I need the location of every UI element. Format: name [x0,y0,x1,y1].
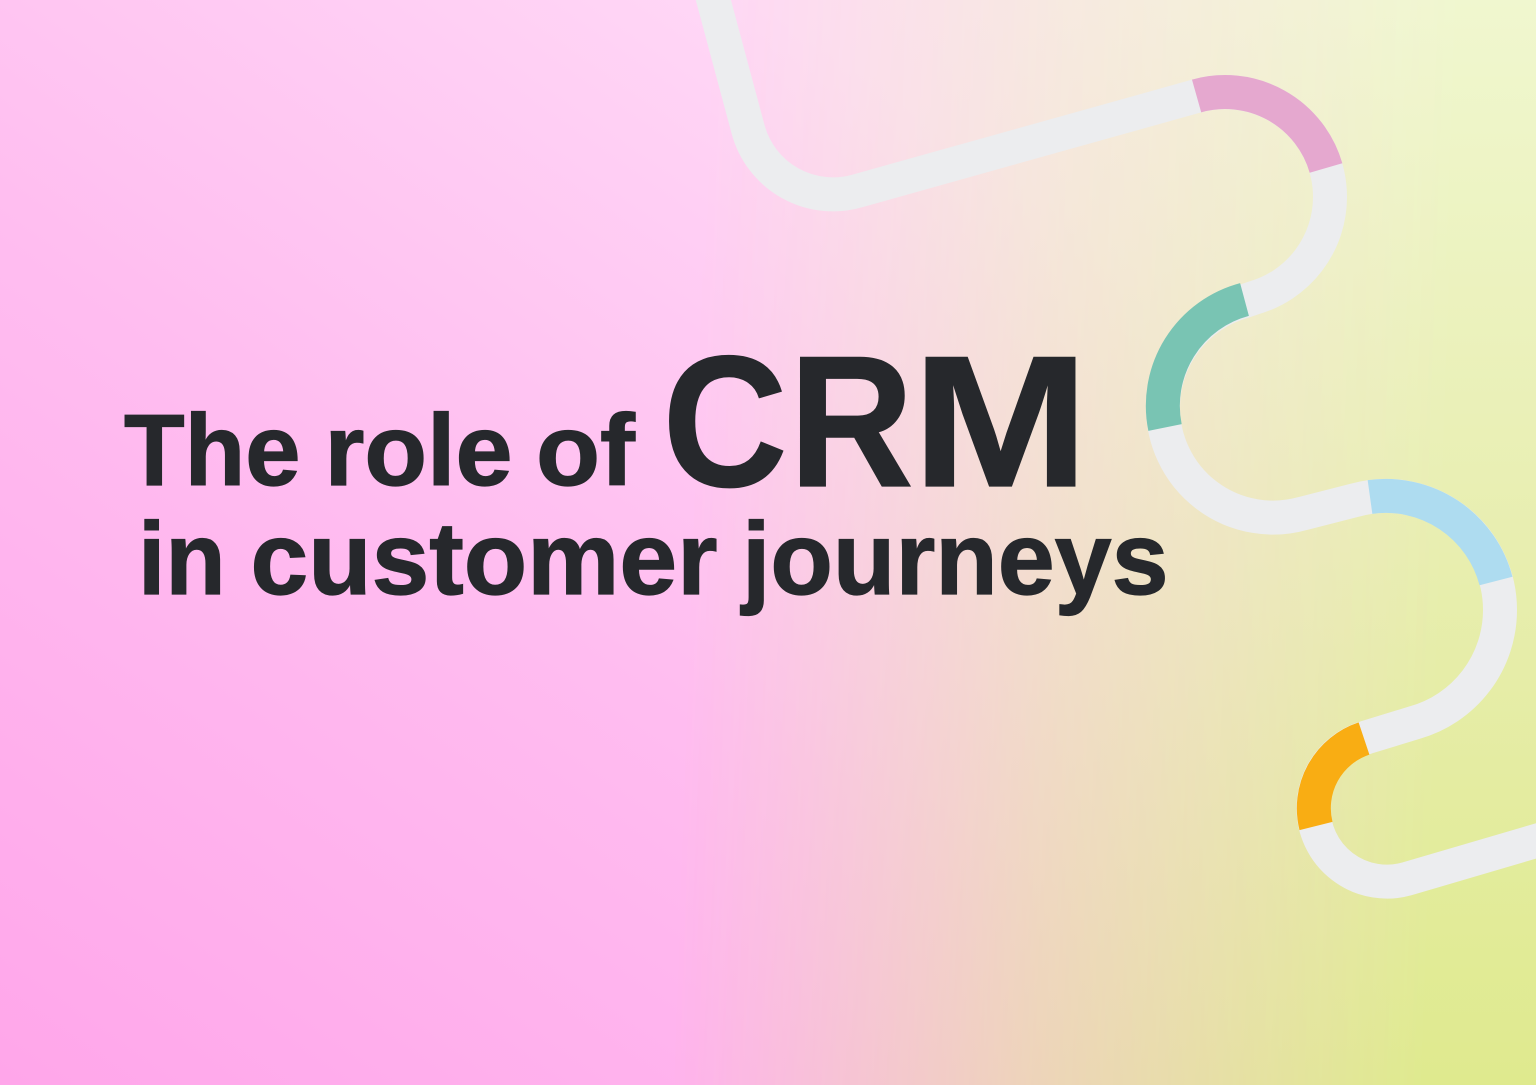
journey path [712,0,1536,882]
title: the role of: role [324,395,512,507]
path segment: orange [1314,738,1364,826]
title: CRM: C [662,317,788,526]
title: in customer journeys [138,501,1168,616]
title: CRM [662,317,1089,526]
path segment: green [1163,300,1244,428]
path segment: pink [1197,92,1326,168]
title: in customer journeys: journeys [740,501,1168,616]
path segment: blue [1370,496,1496,581]
title: CRM: M [912,317,1089,526]
title: CRM: R [789,317,914,526]
title: in customer journeys: customer [250,501,718,616]
title: the role of: The [124,395,300,507]
title: the role of: of [536,395,635,507]
title [124,317,1168,616]
title: in customer journeys: in [138,501,226,616]
path: grey road [712,0,1536,882]
title: the role of [124,395,635,507]
background: green gradient overlay [726,0,1536,1085]
